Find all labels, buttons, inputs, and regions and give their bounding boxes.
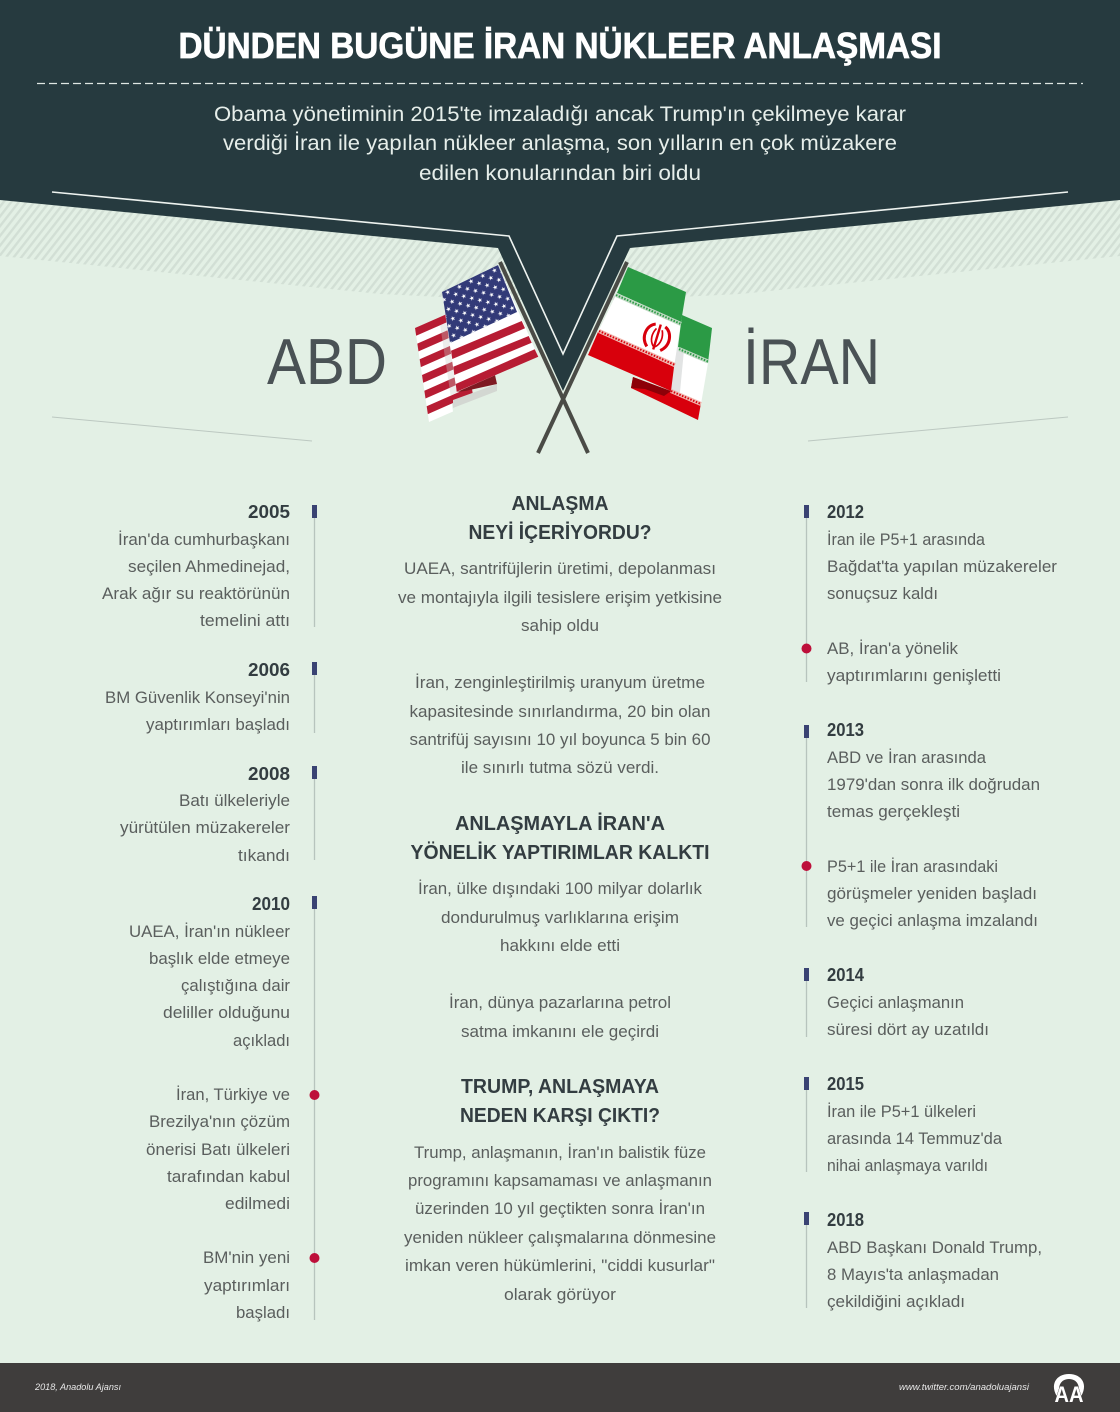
entry: 2012: İran ile P5+1 arasında — [827, 530, 986, 549]
heading: Anlaşma neyi içeriyordu — [468, 493, 652, 544]
entry: AB yaptırımları — [827, 639, 1001, 685]
text block: Trump: üzerinden 10 yıl geçtikten sonra İran'ın — [415, 1199, 705, 1218]
icon: US flag — [415, 265, 538, 422]
entry: 2012: Bağdat'ta yapılan müzakereler — [827, 557, 1057, 576]
entry: 2005: seçilen Ahmedinejad, — [128, 557, 290, 576]
subtitle — [214, 103, 906, 185]
text block: varlıklar: İran, ülke dışındaki 100 milyar dolarlık — [418, 879, 702, 898]
text block: UAEA: sahip oldu — [521, 616, 599, 635]
footer link: www.twitter.com/anadoluajansi — [899, 1382, 1030, 1393]
text block: varlıklar — [418, 879, 702, 955]
subtitle: Obama yönetiminin 2015'te imzaladığı ancak Trump'ın çekilmeye karar — [214, 103, 906, 126]
title: DÜNDEN BUGÜNE İRAN NÜKLEER ANLAŞMASI — [178, 25, 942, 66]
icon: Iran emblem — [641, 321, 673, 353]
subtitle: edilen konularından biri oldu — [419, 162, 701, 185]
entry: 2005: İran'da cumhurbaşkanı — [118, 530, 290, 549]
icon: crossed flags — [415, 262, 712, 453]
text block: Trump: Trump, anlaşmanın, İran'ın balistik füze — [414, 1143, 706, 1162]
timeline markers — [310, 505, 320, 1263]
label: ABD: ABD — [267, 325, 387, 398]
footer credit: 2018, Anadolu Ajansı — [34, 1382, 121, 1393]
entry: 2008: tıkandı — [238, 846, 290, 865]
panel: agreement details — [398, 493, 722, 1304]
icon: flag poles — [500, 262, 627, 453]
text block: Trump: yeniden nükleer çalışmalarına dönmesine — [404, 1228, 716, 1247]
entry: 2014: Geçici anlaşmanın — [827, 993, 964, 1012]
text block: petrol: satma imkanını ele geçirdi — [461, 1022, 659, 1041]
entry: 2014 — [827, 965, 989, 1039]
entry: BM yaptırımları: BM'nin yeni — [203, 1248, 290, 1267]
text block: Trump: olarak görüyor — [504, 1285, 616, 1304]
timeline axis — [314, 505, 316, 1320]
heading: yaptırımlar kalktı — [410, 812, 710, 864]
entry: BM yaptırımları — [203, 1248, 290, 1322]
entry: 2013: temas gerçekleşti — [827, 802, 960, 821]
entry: 2014: süresi dört ay uzatıldı — [827, 1020, 989, 1039]
text block: petrol: İran, dünya pazarlarına petrol — [449, 993, 671, 1012]
text block: uranyum: ile sınırlı tutma sözü verdi. — [461, 758, 659, 777]
entry: çözüm önerisi: Brezilya'nın çözüm — [149, 1112, 290, 1131]
text block: UAEA: UAEA, santrifüjlerin üretimi, depolanması — [404, 559, 716, 578]
entry: 2013 — [827, 720, 1040, 821]
heading: Trump — [460, 1076, 660, 1127]
entry: 2012: sonuçsuz kaldı — [827, 584, 938, 603]
entry: çözüm önerisi: İran, Türkiye ve — [176, 1085, 290, 1104]
entry: 2008: 2008 — [248, 764, 290, 784]
entry: geçici anlaşma: görüşmeler yeniden başladı — [827, 884, 1037, 903]
entry: 2010 — [129, 894, 290, 1050]
panel: İran timeline — [802, 502, 1057, 1311]
entry: 2013: 1979'dan sonra ilk doğrudan — [827, 775, 1040, 794]
entry: geçici anlaşma: ve geçici anlaşma imzalandı — [827, 911, 1038, 930]
text block: Trump — [404, 1143, 716, 1304]
text block: uranyum: İran, zenginleştirilmiş uranyum üretme — [415, 673, 705, 692]
entry: 2015 — [827, 1074, 1003, 1175]
timeline markers — [802, 505, 812, 1225]
text block: uranyum: kapasitesinde sınırlandırma, 20 bin olan — [410, 702, 710, 721]
entry: 2010: açıkladı — [233, 1031, 290, 1050]
entry: 2018: 2018 — [827, 1210, 864, 1230]
heading: Trump: NEDEN KARŞI ÇIKTI? — [460, 1105, 660, 1127]
entry: AB yaptırımları: AB, İran'a yönelik — [827, 639, 958, 658]
text block: varlıklar: hakkını elde etti — [500, 936, 620, 955]
entry: 2006: 2006 — [248, 660, 290, 680]
timeline axis — [806, 505, 808, 1308]
entry: çözüm önerisi: edilmedi — [225, 1194, 290, 1213]
text block: uranyum: santrifüj sayısını 10 yıl boyunca 5 bin 60 — [410, 730, 710, 749]
entry: AB yaptırımları: yaptırımlarını genişletti — [827, 666, 1001, 685]
footer — [0, 1363, 1120, 1412]
text block: UAEA: ve montajıyla ilgili tesislere erişim yetkisine — [398, 588, 722, 607]
entry: 2010: başlık elde etmeye — [149, 949, 290, 968]
entry: 2018: 8 Mayıs'ta anlaşmadan — [827, 1265, 999, 1284]
text block: UAEA — [398, 559, 722, 635]
text block: Trump: programını kapsamaması ve anlaşmanın — [408, 1171, 712, 1190]
heading: yaptırımlar kalktı: YÖNELİK YAPTIRIMLAR KALKTI — [410, 841, 710, 864]
text block: petrol — [449, 993, 671, 1041]
panel: ABD timeline — [102, 502, 320, 1322]
entry: çözüm önerisi: tarafından kabul — [167, 1167, 290, 1186]
entry: 2010: 2010 — [252, 894, 290, 914]
label: İRAN: İRAN — [743, 325, 880, 398]
icon: AA logo: AA — [1054, 1382, 1084, 1407]
entry: 2015: nihai anlaşmaya varıldı — [827, 1156, 988, 1175]
entry: 2005: temelini attı — [200, 611, 290, 630]
entry: 2012 — [827, 502, 1057, 603]
entry: 2008: Batı ülkeleriyle — [179, 791, 290, 810]
heading: Anlaşma neyi içeriyordu: ANLAŞMA — [512, 493, 608, 515]
entry: geçici anlaşma — [827, 857, 1038, 930]
entry: çözüm önerisi — [146, 1085, 290, 1213]
header banner — [0, 0, 1120, 391]
text block: varlıklar: dondurulmuş varlıklarına erişim — [441, 908, 679, 927]
entry: 2010: UAEA, İran'ın nükleer — [129, 922, 290, 941]
text block: uranyum — [410, 673, 710, 777]
entry: geçici anlaşma: P5+1 ile İran arasındaki — [827, 857, 998, 876]
entry: 2006: yaptırımları başladı — [146, 715, 290, 734]
entry: 2018: ABD Başkanı Donald Trump, — [827, 1238, 1042, 1257]
entry: 2015: arasında 14 Temmuz'da — [827, 1129, 1003, 1148]
heading: yaptırımlar kalktı: ANLAŞMAYLA İRAN'A — [455, 812, 665, 835]
entry: BM yaptırımları: yaptırımları — [204, 1276, 290, 1295]
entry: 2013: 2013 — [827, 720, 864, 740]
entry: 2005: Arak ağır su reaktörünün — [102, 584, 290, 603]
entry: 2014: 2014 — [827, 965, 864, 985]
entry: 2005: 2005 — [248, 502, 290, 522]
hatched band — [0, 195, 1120, 300]
entry: 2013: ABD ve İran arasında — [827, 748, 987, 767]
entry: 2008 — [120, 764, 290, 865]
entry: 2010: çalıştığına dair — [181, 976, 290, 995]
entry: 2015: 2015 — [827, 1074, 864, 1094]
entry: BM yaptırımları: başladı — [236, 1303, 290, 1322]
entry: 2006 — [105, 660, 290, 734]
entry: 2012: 2012 — [827, 502, 864, 522]
entry: 2010: deliller olduğunu — [163, 1003, 290, 1022]
entry: 2018: çekildiğini açıkladı — [827, 1292, 965, 1311]
heading: Anlaşma neyi içeriyordu: NEYİ İÇERİYORDU? — [468, 521, 652, 544]
entry: 2005 — [102, 502, 290, 630]
entry: 2006: BM Güvenlik Konseyi'nin — [105, 688, 290, 707]
subtitle: verdiği İran ile yapılan nükleer anlaşma, son yılların en çok müzakere — [223, 132, 897, 155]
entry: 2015: İran ile P5+1 ülkeleri — [827, 1102, 976, 1121]
icon: Iran flag — [588, 267, 712, 420]
entry: 2018 — [827, 1210, 1042, 1311]
entry: çözüm önerisi: önerisi Batı ülkeleri — [146, 1140, 290, 1159]
text block: Trump: imkan veren hükümlerini, "ciddi kusurlar" — [405, 1256, 715, 1275]
heading: Trump: TRUMP, ANLAŞMAYA — [461, 1076, 659, 1098]
entry: 2008: yürütülen müzakereler — [120, 818, 290, 837]
